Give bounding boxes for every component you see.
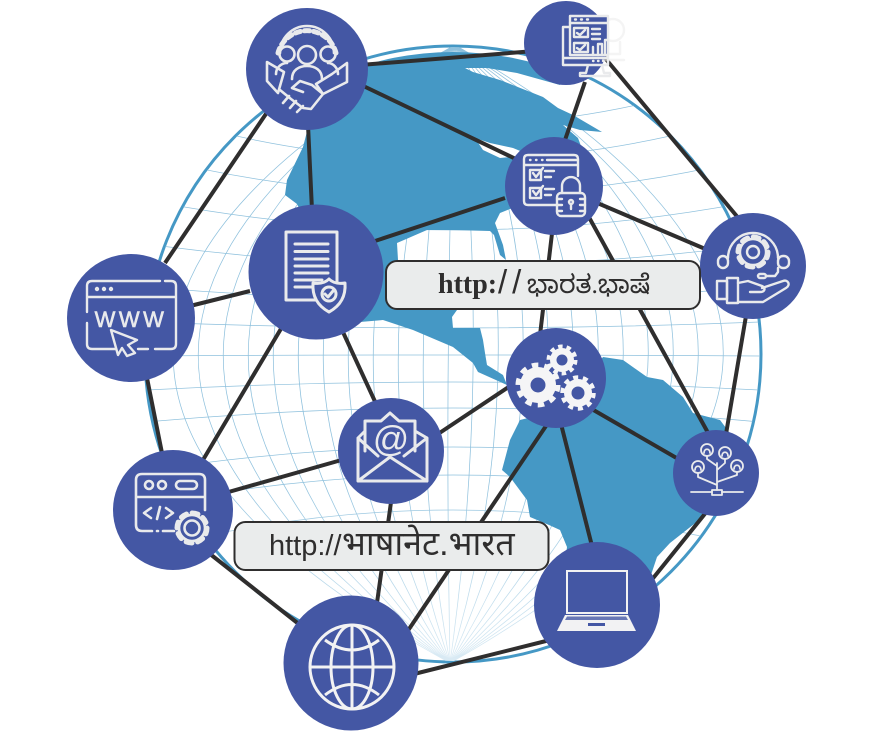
globe bbox=[145, 45, 761, 663]
www text: WWW bbox=[95, 307, 167, 332]
url label: Devanagari: भाषानेट.भारत bbox=[342, 524, 515, 563]
url label: Devanagari: http:// bbox=[269, 530, 342, 562]
landmass: South America bbox=[502, 357, 730, 574]
landmass: North and Central America bbox=[285, 46, 602, 385]
url label: Kannada bbox=[386, 261, 700, 309]
node: people network bbox=[673, 430, 759, 516]
url label: Kannada: http: bbox=[438, 269, 497, 300]
node: www browser bbox=[67, 254, 195, 382]
node: checklist padlock bbox=[505, 137, 603, 235]
at sign: @ bbox=[373, 418, 409, 459]
url label: Devanagari bbox=[234, 522, 548, 570]
node: laptop bbox=[534, 542, 660, 668]
node: support hand bbox=[700, 213, 806, 319]
connecting network lines bbox=[147, 51, 747, 675]
node: gears bbox=[506, 328, 606, 428]
node: dashboard monitor bbox=[524, 1, 624, 85]
node: code window gear bbox=[113, 450, 233, 570]
node: team handshake bbox=[246, 8, 368, 130]
node: globe bbox=[284, 596, 418, 730]
url label: Kannada: ಭಾರತ.ಭಾಷೆ bbox=[527, 270, 650, 299]
node: document shield bbox=[248, 204, 384, 340]
landmass: white bays bbox=[475, 138, 530, 158]
url label: Kannada: // bbox=[498, 263, 526, 300]
node: email envelope bbox=[338, 398, 444, 504]
